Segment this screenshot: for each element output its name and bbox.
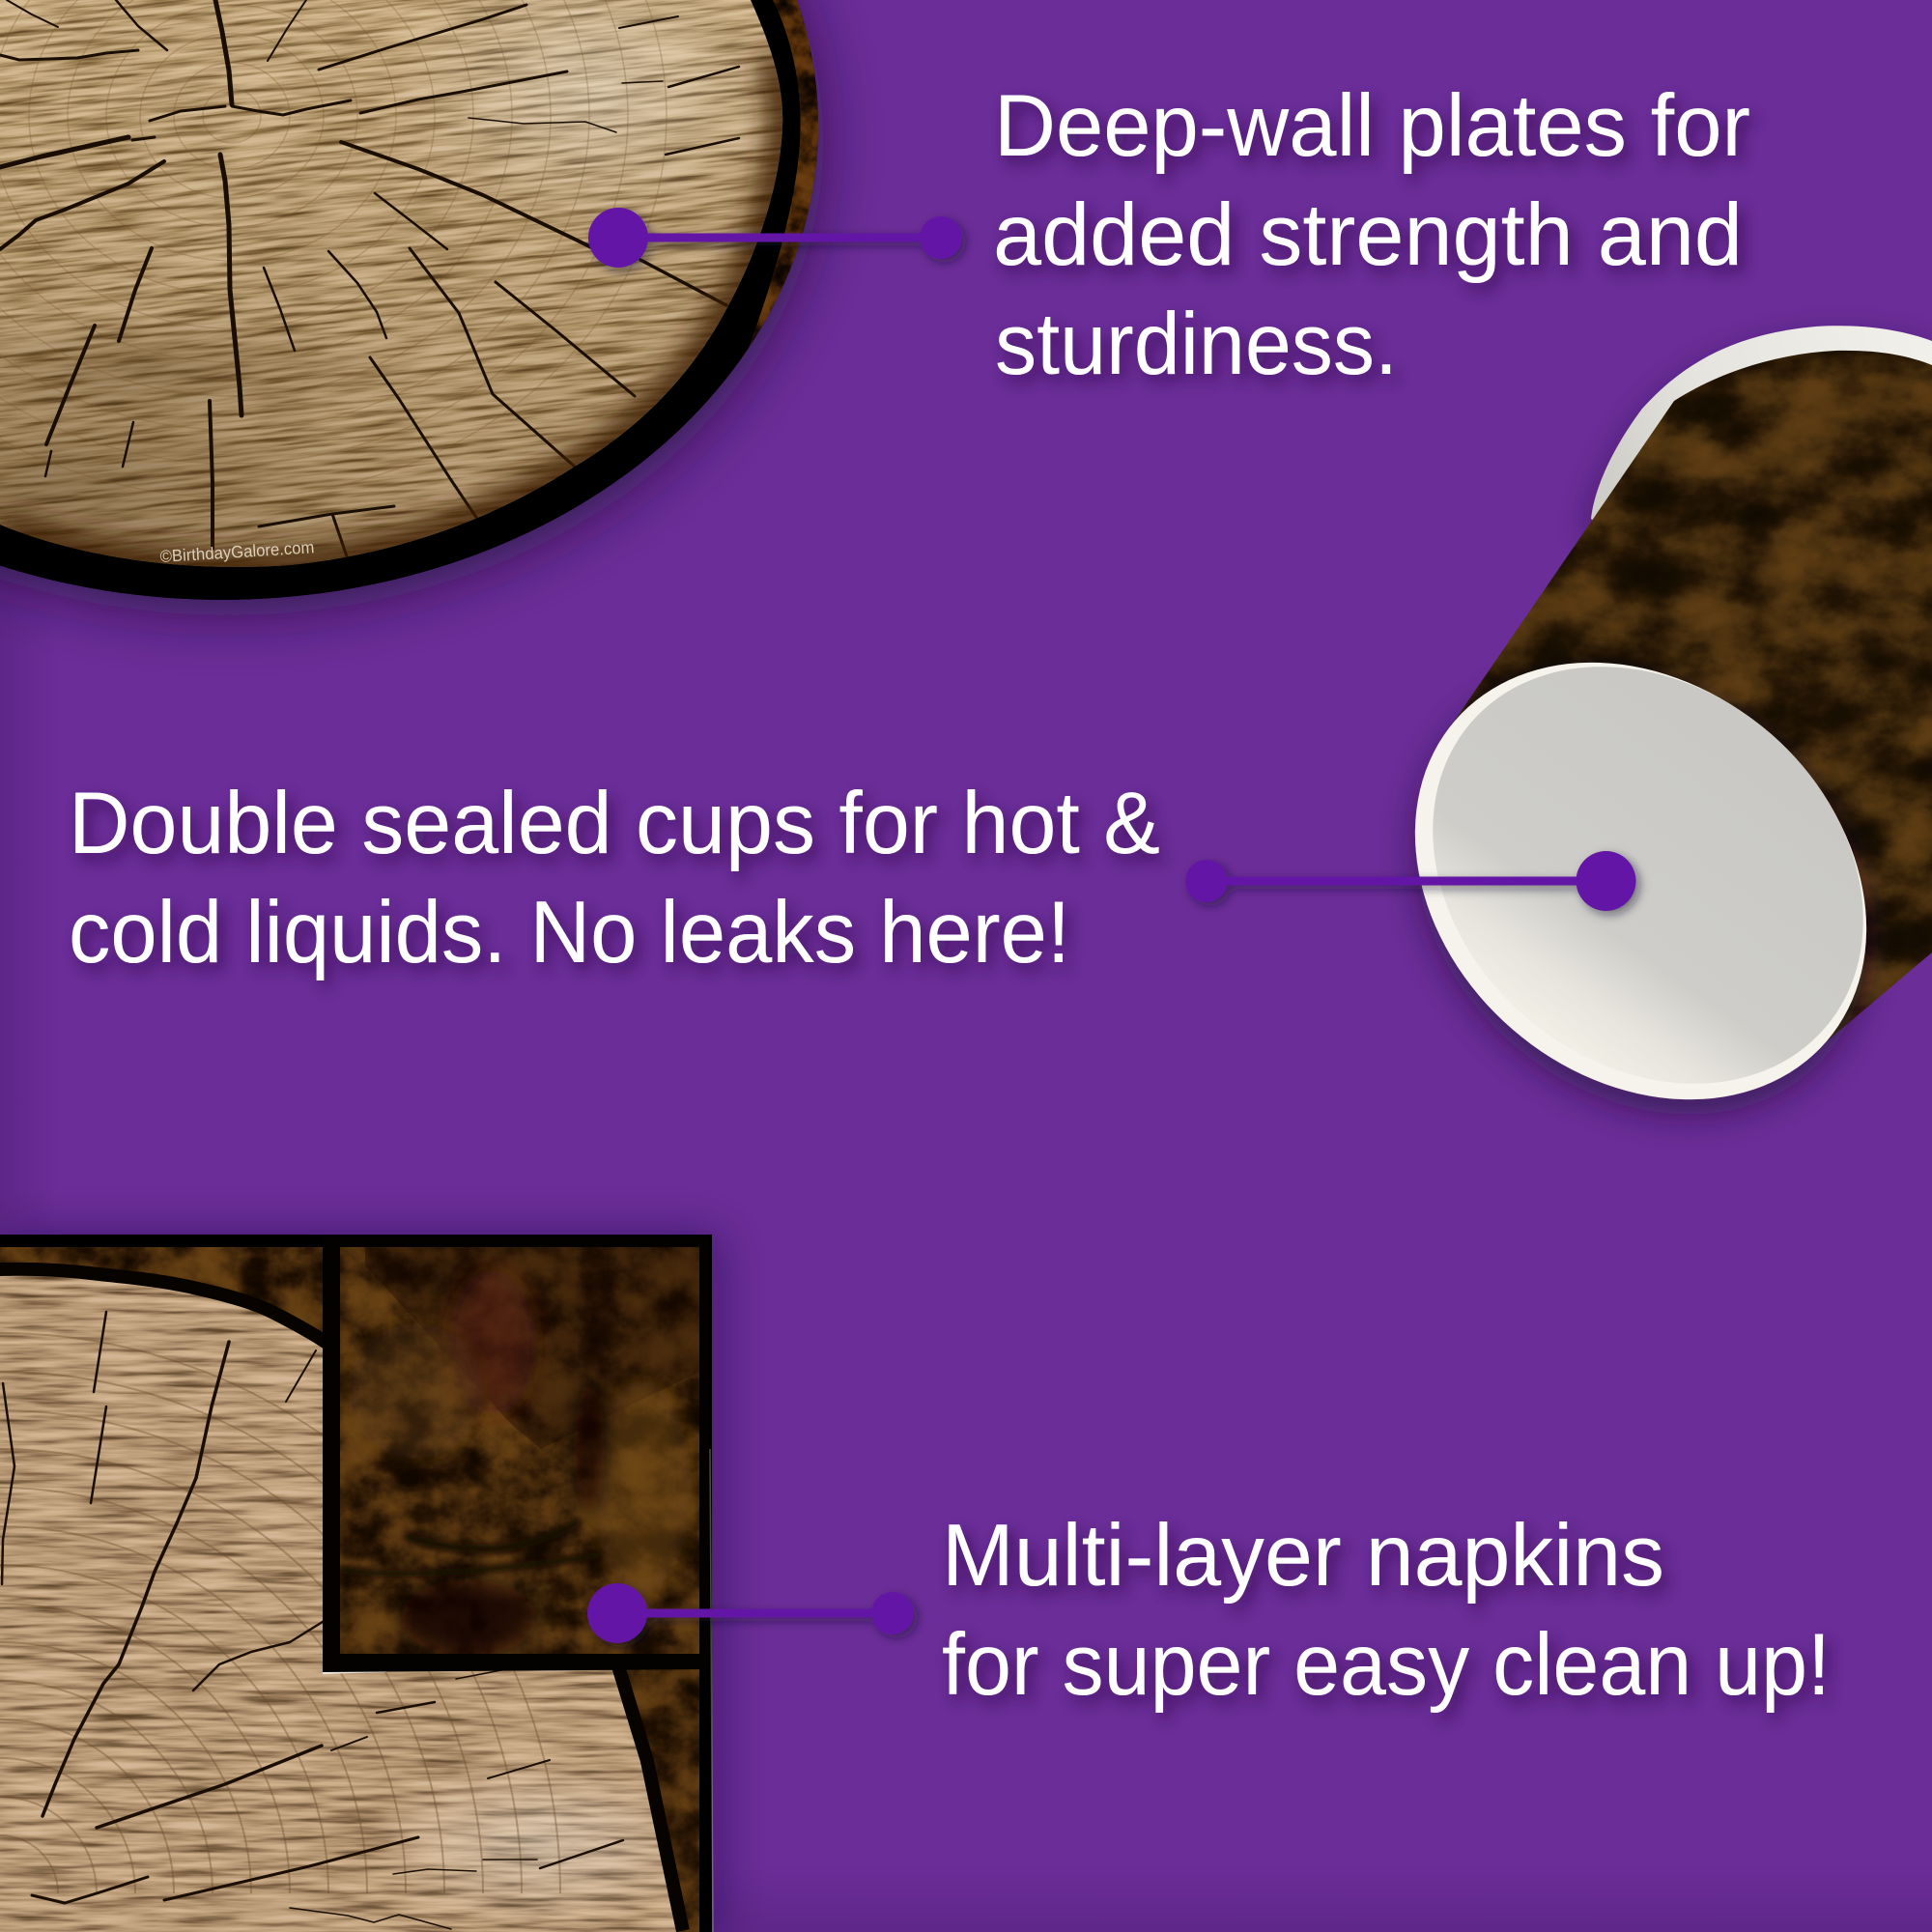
wood cracks	[0, 0, 739, 559]
napkin bark print	[340, 1247, 699, 1657]
text: plates: Deep-wall plates for	[994, 77, 1750, 175]
plate wood surface	[0, 0, 782, 567]
text: napkins	[942, 1507, 1831, 1714]
lower napkin wood	[0, 1256, 715, 1932]
wood rings	[0, 1333, 560, 1893]
cup bark wrap	[1452, 350, 1932, 1043]
wood edge vignette	[0, 58, 782, 567]
panel: paper cup	[1394, 320, 1932, 1136]
text: plates: added strength and	[993, 186, 1743, 284]
growth rings	[0, 0, 667, 497]
connector: napkin callout	[587, 1583, 914, 1643]
panel: napkins	[0, 1235, 715, 1932]
text: napkins: for super easy clean up!	[942, 1616, 1831, 1714]
text: cups: cold liquids. No leaks here!	[69, 884, 1070, 981]
plate rim	[0, 0, 818, 600]
text: cups: Double sealed cups for hot &	[69, 775, 1160, 872]
panel: wood slice plate	[0, 0, 861, 653]
lower napkin light edge	[710, 1449, 713, 1932]
connector: cup callout	[1185, 851, 1636, 911]
lower napkin bark	[0, 1247, 699, 1932]
black band around wood	[0, 1276, 676, 1932]
cup rim	[1591, 326, 1932, 541]
lower napkin border	[0, 1235, 712, 1932]
text: plates	[993, 77, 1750, 393]
plate rim bark band	[749, 0, 818, 348]
text: plates: sturdiness.	[995, 296, 1398, 393]
cup base	[1327, 572, 1932, 1190]
napkin fold shading	[365, 1247, 699, 1449]
text: napkins: Multi-layer napkins	[942, 1507, 1664, 1605]
upper folded napkin	[323, 1235, 709, 1674]
text: cups	[69, 775, 1160, 981]
cup base inner face	[1349, 581, 1932, 1170]
napkin border	[323, 1235, 709, 1672]
napkin wood cracks	[2, 1312, 623, 1929]
connector: plate callout	[588, 208, 962, 268]
watermark: ©BirthdayGalore.com	[159, 537, 315, 566]
napkin highlight sliver	[323, 1663, 386, 1674]
